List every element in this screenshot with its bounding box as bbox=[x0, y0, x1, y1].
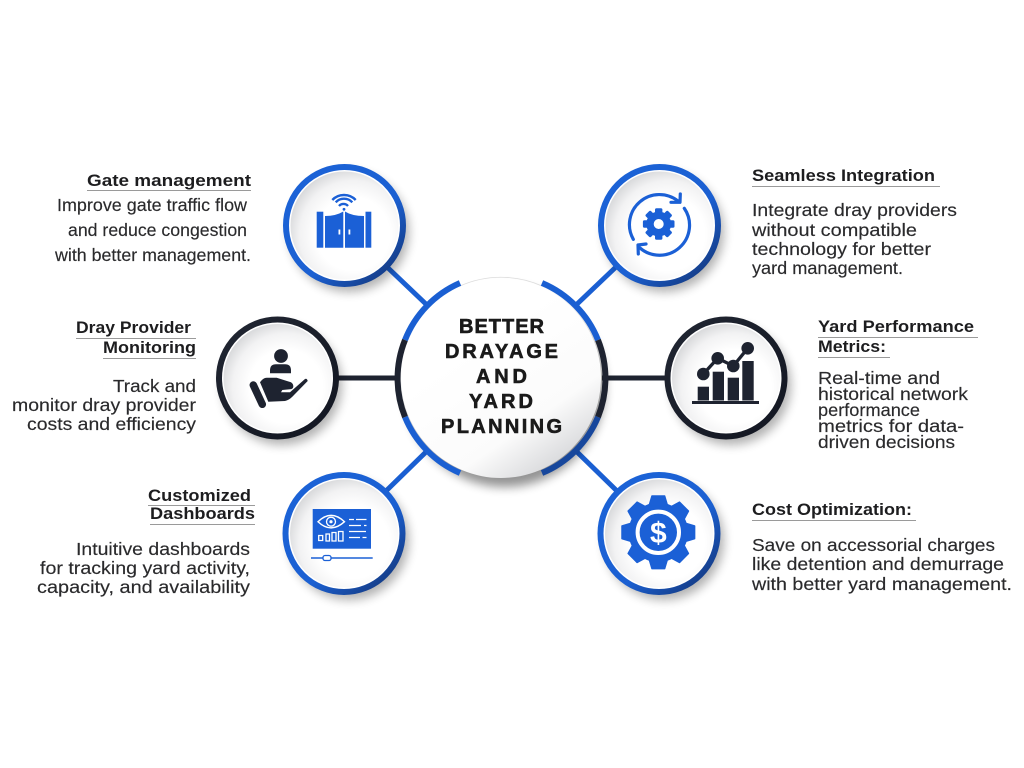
text: dray provider monitoring: monitor dray provider bbox=[12, 395, 196, 415]
node: seamless integration bbox=[601, 167, 724, 292]
text: yard performance metrics: historical network bbox=[818, 384, 968, 404]
text: customized dashboards: Customized bbox=[148, 486, 251, 505]
title: DRAYAGE bbox=[445, 341, 558, 363]
text: customized dashboards: for tracking yard activity, bbox=[40, 558, 250, 578]
text: dray provider monitoring bbox=[12, 318, 196, 434]
icon: dashboard screen with eye bbox=[311, 509, 373, 560]
text: cost optimization: Save on accessorial charges bbox=[752, 535, 995, 555]
text: seamless integration: without compatible bbox=[751, 220, 917, 240]
text: gate management: Gate management bbox=[87, 171, 251, 190]
text: dray provider monitoring: costs and efficiency bbox=[27, 414, 196, 434]
text: yard performance metrics: metrics for data- bbox=[818, 416, 964, 436]
text: yard performance metrics bbox=[818, 317, 978, 452]
connector lines bbox=[336, 266, 668, 491]
node: gate management bbox=[286, 167, 409, 292]
text: seamless integration: technology for better bbox=[752, 239, 931, 259]
node: yard performance metrics bbox=[668, 320, 791, 445]
node: cost optimization bbox=[600, 475, 724, 600]
text: gate management: and reduce congestion bbox=[68, 220, 247, 240]
text: yard performance metrics: Real-time and bbox=[818, 368, 940, 388]
text: gate management: with better management. bbox=[54, 245, 251, 265]
text: cost optimization: with better yard management. bbox=[751, 574, 1012, 594]
icon: gate with wifi bbox=[317, 195, 371, 248]
text: seamless integration: Integrate dray providers bbox=[752, 200, 957, 220]
node: dray provider monitoring bbox=[219, 320, 342, 445]
text: gate management: Improve gate traffic flow bbox=[57, 195, 247, 215]
title bbox=[441, 316, 562, 438]
text: customized dashboards: Intuitive dashboards bbox=[76, 539, 250, 559]
text: yard performance metrics: Yard Performance bbox=[818, 317, 974, 336]
icon: hand holding person bbox=[253, 349, 308, 404]
icon: dollar gear: $ bbox=[650, 517, 667, 550]
text: customized dashboards bbox=[37, 486, 255, 597]
node: customized dashboards bbox=[286, 475, 409, 600]
text: cost optimization: Cost Optimization: bbox=[752, 500, 912, 519]
text: gate management bbox=[54, 171, 251, 265]
title: AND bbox=[476, 366, 527, 388]
text: seamless integration bbox=[751, 166, 957, 278]
text: dray provider monitoring: Monitoring bbox=[103, 338, 196, 357]
text: seamless integration: Seamless Integration bbox=[752, 166, 935, 185]
text: seamless integration: yard management. bbox=[752, 258, 903, 278]
text: customized dashboards: Dashboards bbox=[150, 504, 255, 523]
text: yard performance metrics: driven decisions bbox=[818, 432, 955, 452]
text: yard performance metrics: Metrics: bbox=[818, 337, 886, 356]
icon: bar chart with trend line bbox=[692, 342, 759, 404]
text: cost optimization bbox=[751, 500, 1012, 594]
title: BETTER bbox=[459, 316, 545, 338]
central hub bbox=[398, 277, 605, 487]
title: YARD bbox=[469, 391, 533, 413]
text: cost optimization: like detention and demurrage bbox=[752, 554, 1004, 574]
text: dray provider monitoring: Track and bbox=[113, 376, 196, 396]
text: customized dashboards: capacity, and availability bbox=[37, 577, 250, 597]
title: PLANNING bbox=[441, 416, 562, 438]
text: yard performance metrics: performance bbox=[818, 400, 920, 420]
text: dray provider monitoring: Dray Provider bbox=[76, 318, 191, 337]
icon: gear with sync arrows bbox=[629, 194, 690, 255]
